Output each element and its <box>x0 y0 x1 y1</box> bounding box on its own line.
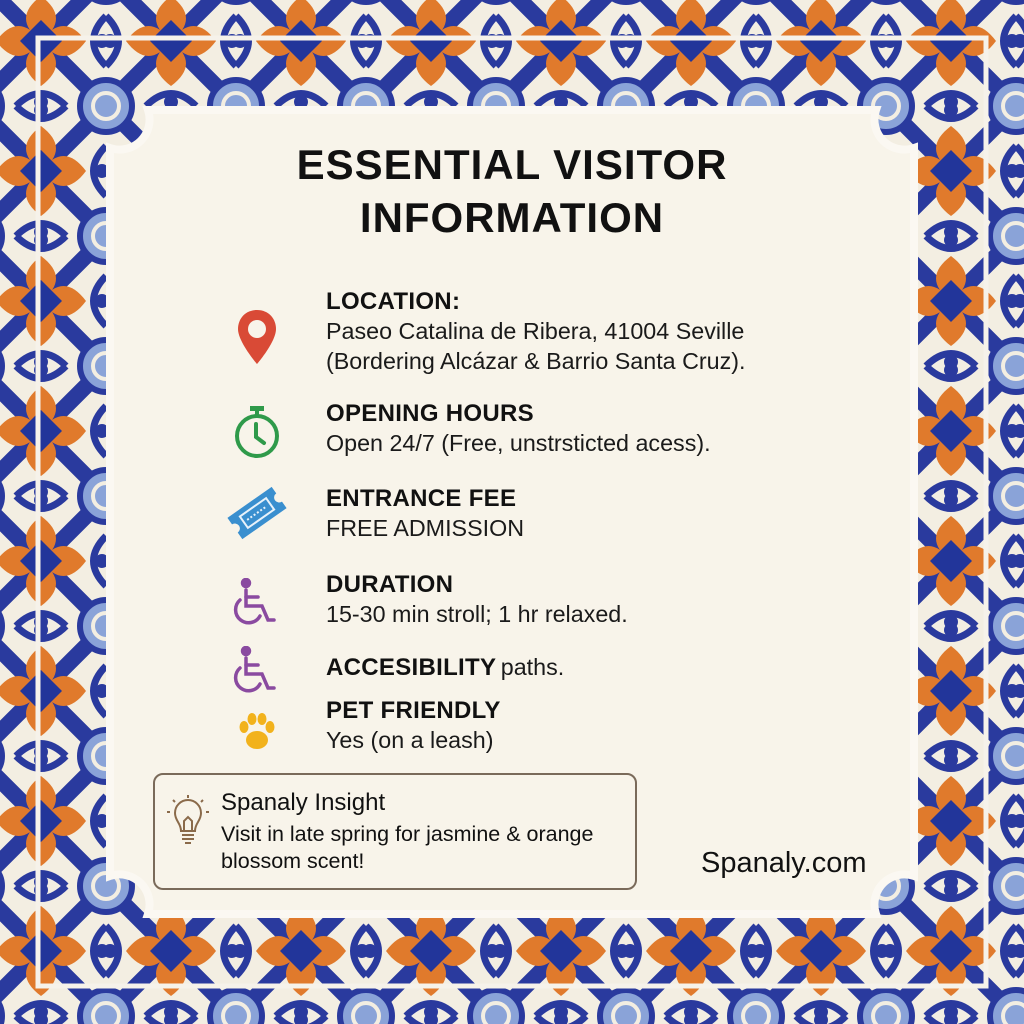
brand: website: Spanaly.com <box>701 847 866 879</box>
title <box>297 141 727 241</box>
callout: Spanaly insight <box>153 773 637 890</box>
icon: paw <box>240 713 274 749</box>
icon: lightbulb <box>167 795 209 844</box>
callout: Spanaly insight: Visit in late spring for jasmine & orange <box>221 822 593 846</box>
icon: wheelchair (accessibility) <box>234 646 276 692</box>
section: entrance fee <box>326 485 524 541</box>
section: location: Paseo Catalina de Ribera, 41004 Seville <box>326 318 744 344</box>
icon: ticket <box>228 486 286 540</box>
section: duration: 15-30 min stroll; 1 hr relaxed. <box>326 601 628 627</box>
icon: location pin <box>238 310 276 364</box>
section: entrance fee: ENTRANCE FEE <box>326 485 516 512</box>
section: pet friendly <box>326 697 501 753</box>
section: entrance fee: FREE ADMISSION <box>326 515 524 541</box>
section: location <box>326 288 746 374</box>
callout: Spanaly insight: Spanaly Insight <box>221 789 385 816</box>
section: opening hours <box>326 400 711 456</box>
section: duration <box>326 571 628 627</box>
section: location: LOCATION: <box>326 288 460 315</box>
title: INFORMATION <box>360 194 664 241</box>
callout: Spanaly insight: blossom scent! <box>221 849 364 873</box>
section: accessibility: ACCESIBILITY paths. <box>326 654 564 681</box>
section: opening hours: OPENING HOURS <box>326 400 534 427</box>
title: ESSENTIAL VISITOR <box>297 141 727 188</box>
section: pet friendly: Yes (on a leash) <box>326 727 494 753</box>
icon: wheelchair (duration) <box>234 578 276 624</box>
section: opening hours: Open 24/7 (Free, unstrsticted acess). <box>326 430 711 456</box>
icon: stopwatch <box>235 406 279 458</box>
section: pet friendly: PET FRIENDLY <box>326 697 501 724</box>
section: location: (Bordering Alcázar & Barrio Santa Cruz). <box>326 348 746 374</box>
section: duration: DURATION <box>326 571 453 598</box>
